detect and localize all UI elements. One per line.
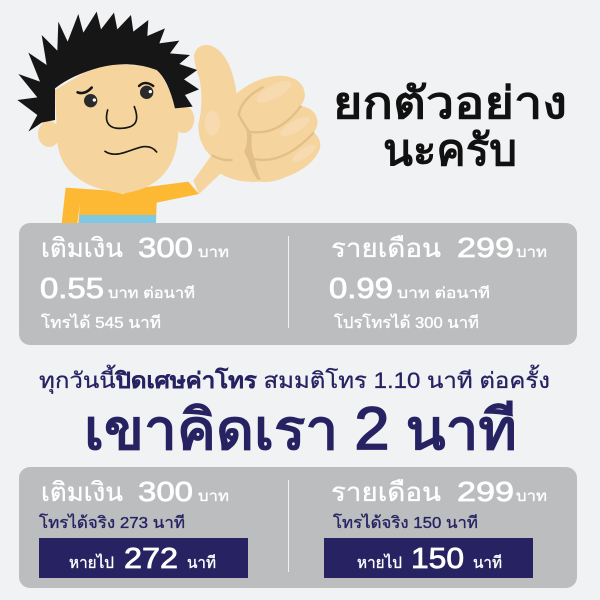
callout: 150 minutes lost [324,538,533,578]
callout: 272 minutes lost: หายไป [69,553,114,572]
shirt undershirt stripe [79,215,156,223]
prepaid column: 0.55 [40,273,104,305]
icon: cartoon man giving thumbs up [17,12,320,223]
left ear [38,121,60,147]
monthly column: 299 [457,232,514,263]
monthly column: 299 [457,476,514,507]
prepaid column: บาท [198,244,229,261]
prepaid column: 300 [138,232,193,263]
prepaid column: เติมเงิน [41,233,123,263]
monthly column [329,232,547,332]
prepaid column: โทรได้จริง 273 นาที [39,513,185,532]
shirt [62,182,199,223]
monthly column: รายเดือน [331,233,441,263]
monthly column: 0.99 [329,273,393,305]
finger creases [213,87,313,160]
thumb highlight [205,111,220,136]
face [55,63,178,193]
monthly column: บาท ต่อนาที [397,285,490,302]
title: ยกตัวอย่าง [333,79,567,128]
panel background [19,223,577,345]
mouth [105,147,157,154]
panel: actual minutes [19,467,577,588]
prepaid column [40,232,229,332]
left eyebrow [78,88,92,93]
hair [17,12,199,132]
icon: thumbs-up hand [194,45,320,182]
title: นะครับ [383,126,517,175]
panel: plans compared [19,223,577,345]
prepaid column: บาท ต่อนาที [108,285,195,302]
nose [106,107,137,128]
title [333,79,567,175]
thumb and palm [194,45,320,182]
text: rounding explanation: ทุกวันนี้ ปิดเศษค่าโทร สมมติโทร 1.10 นาที ต่อครั้ง [39,365,550,394]
forearm [193,153,223,194]
headline: charged two minutes: เขาคิดเรา 2 นาที [84,395,517,462]
prepaid column [39,476,248,578]
prepaid column: บาท [198,488,229,505]
left eye [84,94,97,107]
monthly column: โปรโทรได้ 300 นาที [334,313,479,332]
callout: 272 minutes lost: 272 [124,543,178,575]
monthly column: บาท [516,244,547,261]
callout: 150 minutes lost: นาที [473,554,502,572]
callout: 272 minutes lost [39,538,248,578]
right eyebrow [139,83,153,86]
callout: 150 minutes lost: หายไป [357,553,402,572]
right ear [172,106,194,133]
prepaid column: โทรได้ 545 นาที [41,313,161,332]
monthly column: บาท [516,488,547,505]
monthly column: โทรได้จริง 150 นาที [333,513,478,532]
right eye [140,86,153,99]
prepaid column: เติมเงิน [41,477,123,507]
palm fold [244,128,261,180]
monthly column: รายเดือน [331,477,441,507]
finger highlights [254,77,318,165]
callout: 150 minutes lost: 150 [411,543,464,575]
monthly column [324,476,547,578]
callout: 272 minutes lost: นาที [187,554,216,572]
prepaid column: 300 [138,476,193,507]
panel background [19,467,577,588]
